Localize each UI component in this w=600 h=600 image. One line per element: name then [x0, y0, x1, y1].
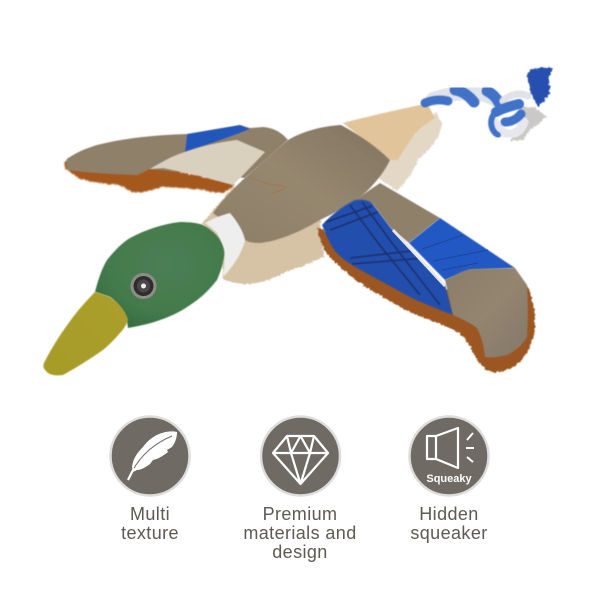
belly fur — [202, 187, 324, 284]
body — [213, 125, 390, 243]
label: premium materials and design: Premium — [263, 504, 337, 524]
feature: hidden squeaker — [410, 416, 488, 543]
eye — [130, 273, 156, 299]
far wing tan panel — [66, 125, 288, 178]
near wing — [317, 183, 535, 372]
white collar — [205, 213, 245, 277]
near wing fur edge — [317, 227, 535, 372]
tail fur — [378, 112, 442, 191]
frayed grey rope end — [510, 106, 547, 141]
far wing — [64, 125, 288, 193]
feature: multi texture — [110, 416, 190, 543]
label: multi texture: texture — [121, 523, 179, 543]
plaid lines — [326, 202, 440, 305]
wing tip tan panel — [445, 268, 528, 357]
icon: diamond — [261, 416, 340, 496]
label: premium materials and design: materials and — [243, 523, 357, 543]
tail cream panel — [343, 105, 435, 160]
blue tuft — [527, 67, 553, 107]
label: hidden squeaker: squeaker — [410, 523, 488, 543]
feature: premium materials — [243, 416, 357, 562]
head — [95, 222, 224, 328]
icon: feather — [110, 416, 190, 496]
label: premium materials and design: design — [272, 542, 328, 562]
blue panel — [409, 218, 515, 280]
plaid panel — [322, 200, 453, 315]
far wing cream panel — [150, 140, 265, 185]
white stitch — [393, 230, 445, 286]
rope tail — [425, 67, 553, 141]
blue panel pleats — [422, 235, 488, 270]
beak — [43, 292, 128, 375]
embroidered signature — [249, 177, 286, 193]
duck plush toy — [43, 67, 553, 375]
rope strands — [425, 90, 528, 135]
icon: speaker: Squeaky — [426, 473, 473, 485]
label: hidden squeaker: Hidden — [419, 504, 479, 524]
near wing tan panel — [355, 183, 440, 243]
label: multi texture: Multi — [130, 504, 170, 524]
far wing fur edge — [64, 158, 236, 193]
far wing blue panel — [185, 125, 250, 152]
